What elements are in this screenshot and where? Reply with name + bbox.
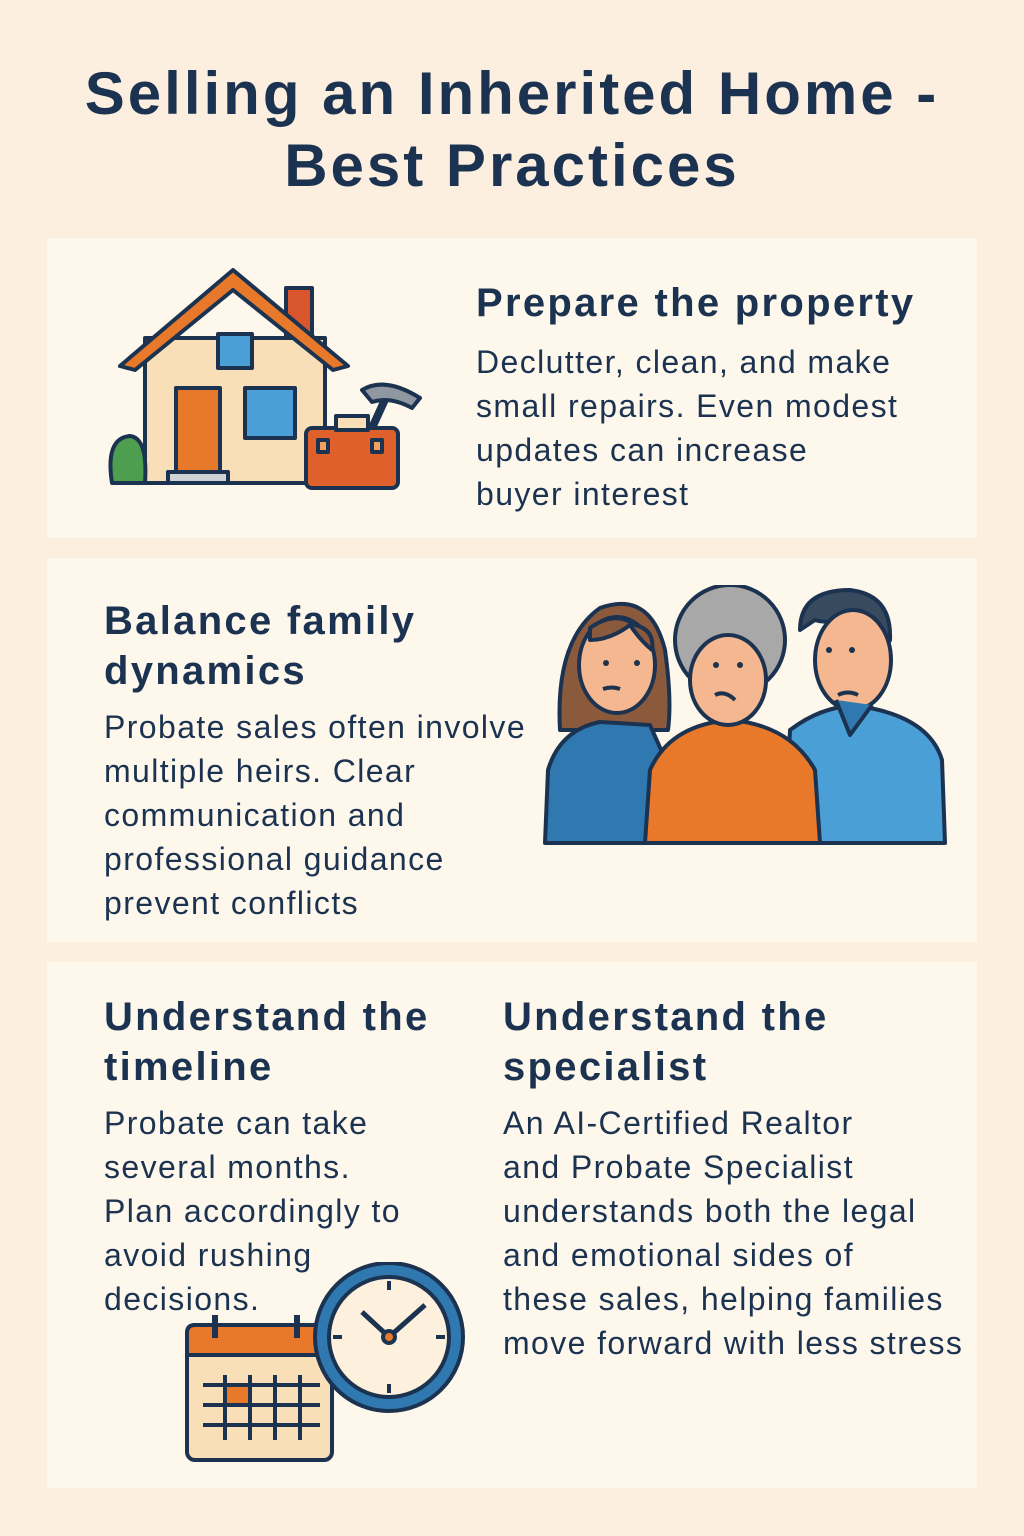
panel: prepare the property (47, 238, 977, 538)
text: family body: Probate sales often involve (104, 709, 526, 745)
heading: balance family: dynamics (104, 649, 307, 693)
text: timeline body (104, 1105, 401, 1317)
heading: understand the specialist: Understand the (503, 995, 829, 1039)
text: timeline body: Plan accordingly to (104, 1193, 401, 1229)
text: specialist body: understands both the legal (503, 1193, 917, 1229)
heading: balance family (104, 599, 416, 693)
text: prepare body (476, 344, 898, 512)
heading: understand the timeline: timeline (104, 1045, 274, 1089)
text: prepare body: buyer interest (476, 476, 689, 512)
heading: understand the timeline: Understand the (104, 995, 430, 1039)
text: specialist body: these sales, helping families (503, 1281, 944, 1317)
title: Selling an Inherited Home - (85, 60, 939, 127)
text: specialist body: and Probate Specialist (503, 1149, 854, 1185)
text: specialist body: and emotional sides of (503, 1237, 854, 1273)
panel: timeline and specialist (47, 962, 977, 1488)
heading: understand the specialist (503, 995, 829, 1089)
text: prepare body: small repairs. Even modest (476, 388, 898, 424)
heading: prepare the property: Prepare the property (476, 281, 915, 325)
text: timeline body: decisions. (104, 1281, 260, 1317)
text: family body: prevent conflicts (104, 885, 359, 921)
text: family body: communication and (104, 797, 405, 833)
text: prepare body: updates can increase (476, 432, 808, 468)
icon: three family members (543, 585, 947, 845)
text: timeline body: avoid rushing (104, 1237, 313, 1273)
icon: house with toolbox (108, 268, 422, 490)
title (85, 60, 939, 199)
text: timeline body: several months. (104, 1149, 351, 1185)
text: family body: multiple heirs. Clear (104, 753, 416, 789)
heading: balance family: Balance family (104, 599, 416, 643)
text: family body: professional guidance (104, 841, 445, 877)
text: family body (104, 709, 526, 921)
title: Best Practices (284, 132, 740, 199)
text: timeline body: Probate can take (104, 1105, 368, 1141)
heading: understand the timeline (104, 995, 430, 1089)
text: prepare body: Declutter, clean, and make (476, 344, 891, 380)
icon: calendar and clock (185, 1262, 465, 1462)
text: specialist body: An AI-Certified Realtor (503, 1105, 854, 1141)
heading: understand the specialist: specialist (503, 1045, 708, 1089)
panel: balance family dynamics (47, 558, 977, 942)
text: specialist body: move forward with less stress (503, 1325, 963, 1361)
text: specialist body (503, 1105, 963, 1361)
